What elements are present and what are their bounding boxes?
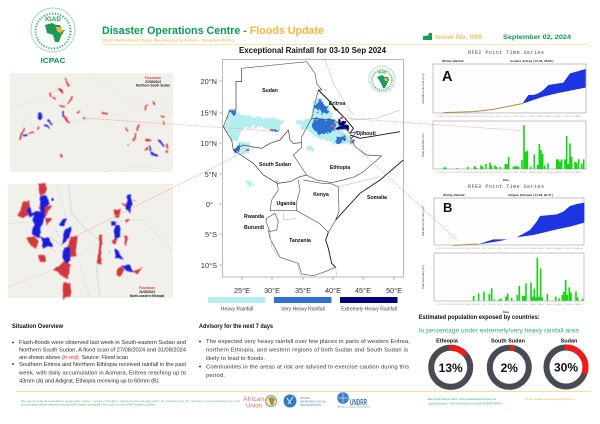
rainfall chart B: Adigrat, Ethiopia: Adigrat_Ethiopia ( 14.28, 39.47 ) — [508, 193, 553, 197]
map legend: Very Heavy Rainfall — [281, 306, 325, 312]
advisory: The expected very heavy rainfall over few places in parts of western Eritrea, — [206, 339, 410, 345]
donut: Sudan 30%: Sudan — [561, 338, 578, 344]
country borders — [223, 60, 400, 183]
situation overview: Flash-floods were observed last week in South-eastern Sudan and — [19, 340, 186, 346]
rainfall chart B: Adigrat, Ethiopia: Date — [503, 310, 509, 314]
header: issue number — [423, 33, 483, 41]
partner logo: UNDRR: UN Office for Disaster Risk Reduction — [337, 406, 370, 408]
map legend: Extremely Heavy Rainfall — [341, 306, 397, 312]
country labels: Djibouti — [356, 131, 376, 137]
country labels: Uganda — [276, 201, 296, 207]
daily rainfall bars chart B — [474, 258, 583, 301]
flood scan map: Northern South Sudan: 27/08/2024 — [145, 80, 161, 84]
rainfall chart A: Asmara, Eritrea: 01JUN 11JUN 16JUN 21JUN 26JUN 1JUL 6JUL 11JUL 16JUL 21JUL 26JUL 1AUG 6AUG 11AUG 16AUG 21AUG 26AUG — [435, 171, 581, 174]
flood scan map: North-eastern Ethiopia: 31/08/2024 — [139, 290, 155, 294]
advisory: Advisory for the next 7 days — [199, 324, 274, 330]
rainfall chart B: Adigrat, Ethiopia: Rainfall vs Normal (mm) — [421, 206, 425, 236]
advisory — [199, 324, 410, 379]
rainfall map — [200, 60, 404, 295]
latitude and longitude labels: 10°S — [201, 261, 217, 270]
advisory: Communities in the areas at risk are advised to exercise caution during this — [206, 364, 409, 370]
rainfall chart A: Asmara, Eritrea: RFE2 Point Time Series — [468, 50, 544, 56]
flood scan map: North-eastern Ethiopia: Floodscan — [139, 286, 155, 290]
donut: Sudan 30% — [546, 338, 586, 386]
latitude and longitude labels: 5°N — [205, 170, 217, 179]
donut: Sudan 30%: 30% — [554, 360, 578, 374]
partner logo: World Meteorological Organization — [284, 394, 327, 408]
latitude and longitude labels: 45°E — [355, 286, 371, 295]
cumulative rainfall chart B — [453, 203, 584, 245]
rainfall chart B: Adigrat, Ethiopia: 01JUN 11JUN 16JUN 21JUN 26JUN 1JUL 6JUL 11JUL 16JUL 21JUL 26JUL 1AUG 6AUG 11AUG 16AUG 21AUG 26AUG — [436, 247, 582, 250]
situation overview: Situation Overview — [12, 324, 63, 330]
header: date: September 02, 2024 — [503, 34, 572, 41]
donut: South Sudan 2% — [490, 338, 529, 387]
latitude and longitude labels: 35°E — [295, 286, 311, 295]
partner logo: African Union — [243, 396, 276, 410]
rainfall chart B: Adigrat, Ethiopia: Daily Rainfall (mm) — [421, 265, 425, 289]
header: IGAD ICPAC logo: ICPAC — [40, 56, 66, 65]
partner logo: African Union: Union — [246, 402, 262, 410]
latitude and longitude labels: 25°E — [234, 286, 250, 295]
latitude and longitude labels: 5°S — [205, 230, 217, 239]
flood scan map: Northern South Sudan — [10, 73, 173, 172]
partner logo: UNDRR — [337, 392, 370, 408]
footer disclaimer — [21, 400, 240, 406]
latitude and longitude labels: 50°E — [386, 286, 402, 295]
map legend: Heavy Rainfall — [221, 306, 253, 312]
advisory: northern Ethiopia, and western regions of both Sudan and South Sudan is — [206, 348, 408, 354]
country labels: South Sudan — [259, 162, 291, 168]
rainfall chart A: Asmara, Eritrea: Rainfall vs Normal (mm) — [421, 73, 425, 104]
latitude and longitude labels: 40°E — [325, 286, 341, 295]
country labels: Somalia — [367, 195, 387, 201]
inset IGAD logo — [369, 66, 395, 92]
situation overview: 43mm (A) and Adigrat, Ethiopia receiving up to 60mm (B). — [19, 378, 160, 384]
map heading: Exceptional Rainfall for 03-10 Sep 2024 — [239, 46, 387, 55]
footer sources: Satellite Sources : CPSv Earth Monitor Suite/NOAA/RFE/TAMSAT — [428, 402, 503, 406]
rainfall chart A: Asmara, Eritrea: Daily Rainfall (mm) — [421, 133, 425, 157]
situation overview: Southern Eritrea and Northern Ethiopia received rainfall in the past — [19, 362, 186, 368]
situation overview: Northern South Sudan, A flood scan of 27/08/2024 and 31/08/2024 — [19, 348, 187, 354]
header: subtitle: IGAD Multi-Hazard Early Warning Early Action - Situation-Room — [102, 38, 234, 42]
partner logo: World Meteorological Organization: METEOROLOGICAL — [300, 400, 327, 404]
partner logo: African Union: African — [243, 396, 264, 403]
latitude and longitude labels: 20°N — [200, 77, 217, 86]
rainfall areas — [225, 98, 355, 187]
population exposure subheading: In percentage under extremely/very heavy rainfall area — [419, 328, 579, 334]
header: IGAD ICPAC logo — [31, 8, 75, 65]
country labels: Rwanda — [244, 214, 264, 220]
rainfall chart A: Asmara, Eritrea — [421, 50, 586, 182]
country labels: Sudan — [262, 88, 278, 94]
header: IGAD ICPAC logo: IGAD — [45, 16, 61, 23]
rainfall chart B: Adigrat, Ethiopia: 01JUN 11JUN 16JUN 21JUN 26JUN 1JUL 6JUL 11JUL 16JUL 21JUL 26JUL 1AUG 6AUG 11AUG 16AUG 21AUG 26AUG — [436, 303, 582, 306]
latitude and longitude labels — [200, 77, 402, 295]
rainfall chart A: Asmara, Eritrea: Asmara_Eritrea ( 15.33, 38.83 ) — [510, 59, 553, 63]
header: issue number: Issue No. 059 — [435, 34, 483, 41]
footer disclaimer: free or implying official endorsement by the IGAD Disaster Operations Centre (DOC) or from ICPAC Member Countries. — [21, 404, 156, 406]
population exposure heading: Estimated population exposed by countries: — [419, 315, 540, 321]
daily rainfall bars chart A — [444, 125, 584, 169]
donut: Ethiopia 13%: 13% — [439, 361, 463, 375]
advisory: period. — [206, 373, 225, 379]
country labels: Kenya — [313, 192, 329, 198]
rainfall chart B: Adigrat, Ethiopia: 90-Day Rainfall — [443, 193, 465, 197]
rainfall chart B: Adigrat, Ethiopia: RFE2 Point Time Series — [468, 184, 544, 190]
footer disclaimer: The use of political boundaries, geographic names, related information, and potential considerations for responses are for reference, not warranted to be error — [21, 400, 240, 403]
rainfall chart A: Asmara, Eritrea: 01JUN 11JUN 16JUN 21JUN 26JUN 1JUL 6JUL 11JUL 16JUL 21JUL 26JUL 1AUG 6AUG 11AUG 16AUG 21AUG 26AUG — [435, 115, 581, 118]
footer contact: Contact: disaster.risk.management@icpac.net — [525, 398, 575, 401]
footer sources — [428, 398, 503, 406]
donut: Ethiopia 13%: Ethiopia — [436, 338, 459, 344]
latitude and longitude labels: 0° — [206, 200, 213, 209]
flood scan map: Northern South Sudan: Northern South Sudan — [136, 84, 170, 88]
donut: Ethiopia 13% — [431, 338, 470, 387]
connector lines between map and insets — [68, 118, 527, 241]
situation overview: are shown above (in red). Source: Flood scan — [19, 355, 128, 361]
partner logo: UNDRR: UNDRR — [350, 398, 367, 407]
country labels — [244, 88, 387, 244]
country labels: Ethiopia — [330, 165, 350, 171]
rainfall chart A: Asmara, Eritrea: Date — [503, 178, 509, 182]
situation overview: week, with daily accumulation in Asmara, Eritrea reaching up to — [18, 370, 186, 376]
partner logo: World Meteorological Organization: ORGANIZATION — [300, 403, 321, 407]
cumulative rainfall chart A — [443, 69, 586, 113]
donut: South Sudan 2%: 2% — [501, 361, 518, 375]
latitude and longitude labels: 10°N — [200, 139, 217, 148]
map legend — [208, 297, 398, 312]
rainfall chart B: Adigrat, Ethiopia — [421, 184, 584, 314]
donut: South Sudan 2%: South Sudan — [491, 338, 526, 344]
rainfall chart A: Asmara, Eritrea: A — [442, 69, 453, 85]
flood scan map: North-eastern Ethiopia: North-eastern Ethiopia — [130, 294, 164, 298]
partner logo: World Meteorological Organization: WORLD — [300, 396, 310, 400]
situation overview — [12, 324, 187, 384]
country labels: Eritrea — [329, 101, 345, 107]
latitude and longitude labels: 15°N — [200, 108, 217, 118]
latitude and longitude labels: 30°E — [264, 286, 280, 295]
header: title: Disaster Operations Centre - Floods Update — [102, 25, 324, 37]
flood scan map: North-eastern Ethiopia — [8, 184, 173, 298]
country labels: Tanzania — [289, 238, 311, 244]
flood scan map: Northern South Sudan: Floodscan — [145, 76, 161, 80]
inset IGAD logo: IGAD — [378, 70, 387, 74]
rainfall chart B: Adigrat, Ethiopia: B — [443, 200, 452, 215]
footer sources: East Africa Hazards Watch: https://eahazardswatch.icpac.net — [428, 398, 496, 401]
rainfall chart A: Asmara, Eritrea: 90-Day Rainfall — [442, 59, 464, 63]
advisory: likely to lead to floods. — [206, 356, 265, 362]
country labels: Burundi — [244, 225, 264, 231]
